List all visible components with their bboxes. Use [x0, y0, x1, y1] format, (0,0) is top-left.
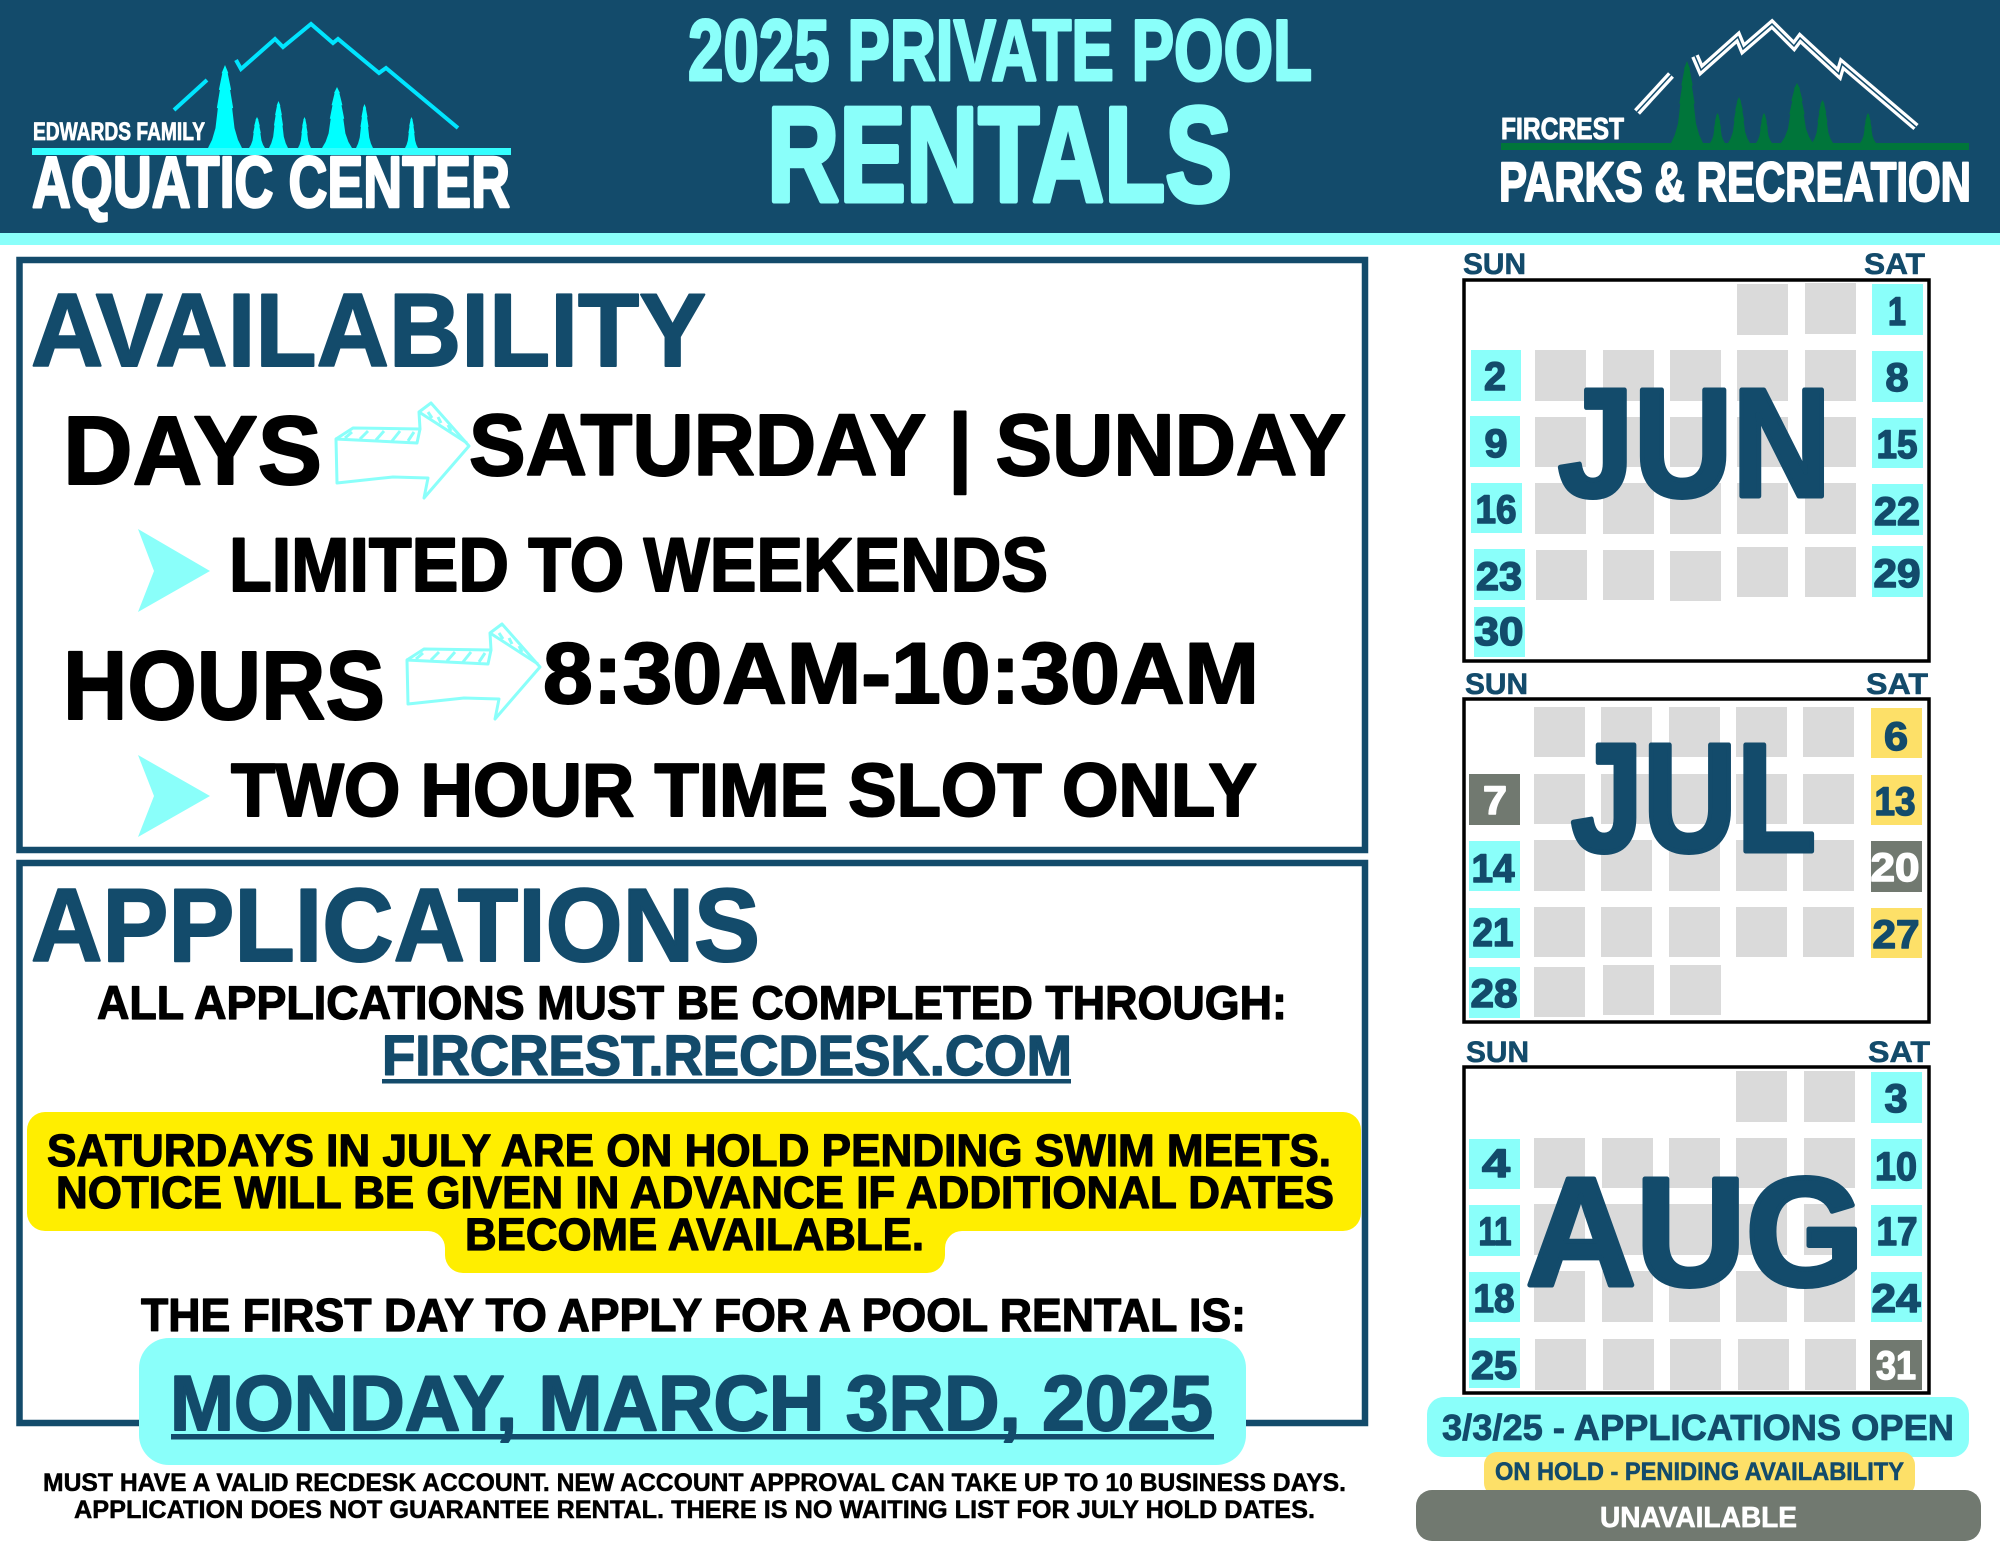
panel: applications — [20, 863, 1365, 1465]
weekend date cells: 16 — [1476, 488, 1516, 532]
legend: unavailable — [1416, 1490, 1981, 1541]
icon: triangle bullet — [138, 529, 210, 612]
calendar frame — [1464, 280, 1929, 661]
weekend date cells: 21 — [1472, 911, 1514, 955]
calendar: June — [1463, 248, 1929, 661]
weekend date cells: 29 — [1874, 552, 1920, 596]
label: hours: HOURS — [63, 631, 385, 740]
calendar: August — [1464, 1036, 1930, 1393]
weekend date cells: 23 — [1476, 555, 1522, 599]
weekday grey cells — [1534, 707, 1854, 1017]
legend — [1416, 1397, 1981, 1541]
heading: applications: APPLICATIONS — [31, 868, 760, 984]
panel: availability — [20, 260, 1365, 850]
weekday labels: SUN — [1465, 668, 1528, 701]
month name: JUN — [1558, 357, 1831, 529]
logo: Edwards Family Aquatic Center — [32, 24, 511, 223]
title — [688, 3, 1312, 230]
icon: sketched arrow to days — [335, 403, 469, 498]
logo: Edwards Family Aquatic Center: EDWARDS FAMILY — [33, 118, 205, 146]
legend: on hold: ON HOLD - PENIDING AVAILABILITY — [1495, 1458, 1904, 1486]
callout: saturdays in july on hold: SATURDAYS IN JULY ARE ON HOLD PENDING SWIM MEETS. — [47, 1125, 1331, 1176]
weekend date cells: 20 — [1870, 846, 1920, 890]
weekday labels — [1465, 668, 1928, 701]
text: two hour time slot only: TWO HOUR TIME SLOT ONLY — [231, 748, 1257, 832]
weekend date cells: 13 — [1874, 780, 1916, 824]
weekday labels: SUN — [1463, 248, 1526, 281]
text: rental hours: 8:30AM-10:30AM — [543, 626, 1259, 722]
logo: Edwards Family Aquatic Center: AQUATIC CENTER — [32, 143, 510, 223]
weekend date cells: 14 — [1472, 847, 1515, 891]
callout: saturdays in july on hold — [27, 1112, 1361, 1273]
weekday grey cells — [1534, 1071, 1856, 1390]
footnote — [43, 1469, 1346, 1524]
link: fircrest.recdesk.com: FIRCREST.RECDESK.COM — [382, 1024, 1072, 1088]
callout: saturdays in july on hold: BECOME AVAILABLE. — [465, 1209, 924, 1260]
weekend date cells: 8 — [1886, 356, 1908, 400]
weekday labels: SAT — [1864, 248, 1925, 281]
weekend date cells: 7 — [1483, 779, 1507, 823]
legend: on hold — [1484, 1452, 1915, 1496]
heading: availability: AVAILABILITY — [31, 273, 706, 389]
weekend date cells: 17 — [1876, 1210, 1918, 1254]
weekday labels: SAT — [1868, 1036, 1930, 1069]
footnote: MUST HAVE A VALID RECDESK ACCOUNT. NEW ACCOUNT APPROVAL CAN TAKE UP TO 10 BUSINESS DAYS. — [43, 1469, 1346, 1497]
legend: applications open — [1427, 1397, 1969, 1457]
weekend date cells: 24 — [1872, 1277, 1921, 1321]
weekend date cells — [1470, 284, 1923, 657]
label: days: DAYS — [63, 396, 322, 505]
weekday grey cells — [1535, 283, 1856, 601]
weekend date cells: 9 — [1484, 422, 1508, 466]
callout: saturdays in july on hold: NOTICE WILL BE GIVEN IN ADVANCE IF ADDITIONAL DATES — [56, 1167, 1334, 1218]
weekday labels — [1466, 1036, 1930, 1069]
weekend date cells: 4 — [1482, 1142, 1511, 1186]
weekday labels — [1463, 248, 1925, 281]
text: limited to weekends: LIMITED TO WEEKENDS — [229, 523, 1048, 608]
weekend date cells: 27 — [1872, 913, 1920, 957]
text: first day to apply: THE FIRST DAY TO APPLY FOR A POOL RENTAL IS: — [141, 1289, 1246, 1341]
weekend date cells: 10 — [1875, 1145, 1917, 1189]
weekend date cells — [1469, 1072, 1922, 1390]
weekend date cells: 18 — [1474, 1277, 1514, 1321]
month name: JUL — [1571, 712, 1816, 884]
weekend date cells: 30 — [1474, 610, 1524, 654]
weekend date cells: 6 — [1884, 715, 1908, 759]
weekday labels: SUN — [1466, 1036, 1529, 1069]
callout: first day date: MONDAY, MARCH 3RD, 2025 — [170, 1359, 1213, 1447]
weekend date cells: 31 — [1876, 1344, 1916, 1388]
calendar frame — [1464, 1067, 1929, 1393]
title: 2025 PRIVATE POOL — [688, 3, 1312, 99]
weekday labels: SAT — [1866, 668, 1928, 701]
text: saturday and sunday: SATURDAY | SUNDAY — [469, 397, 1346, 495]
text: all applications must be completed: ALL APPLICATIONS MUST BE COMPLETED THROUGH: — [97, 976, 1287, 1029]
weekend date cells: 15 — [1876, 423, 1918, 467]
calendar: July — [1464, 668, 1929, 1022]
callout: first day date — [139, 1338, 1246, 1465]
legend: applications open: 3/3/25 - APPLICATIONS OPEN — [1442, 1407, 1954, 1448]
legend: unavailable: UNAVAILABLE — [1600, 1502, 1797, 1534]
weekend date cells — [1469, 708, 1922, 1018]
title: RENTALS — [767, 79, 1232, 230]
logo: Fircrest Parks and Recreation — [1499, 24, 1971, 213]
weekend date cells: 1 — [1888, 290, 1906, 334]
footnote: APPLICATION DOES NOT GUARANTEE RENTAL. THERE IS NO WAITING LIST FOR JULY HOLD DATES. — [74, 1496, 1315, 1524]
weekend date cells: 3 — [1884, 1077, 1908, 1121]
icon: sketched arrow to hours — [406, 624, 540, 719]
logo: Fircrest Parks and Recreation: FIRCREST — [1501, 111, 1624, 146]
weekend date cells: 22 — [1874, 490, 1920, 534]
weekend date cells: 11 — [1478, 1210, 1512, 1254]
weekend date cells: 2 — [1484, 355, 1506, 399]
header banner — [0, 0, 2000, 245]
icon: triangle bullet — [138, 755, 210, 837]
calendar frame — [1464, 699, 1929, 1022]
month name: AUG — [1526, 1146, 1864, 1318]
weekend date cells: 28 — [1470, 972, 1518, 1016]
weekend date cells: 25 — [1471, 1344, 1517, 1388]
